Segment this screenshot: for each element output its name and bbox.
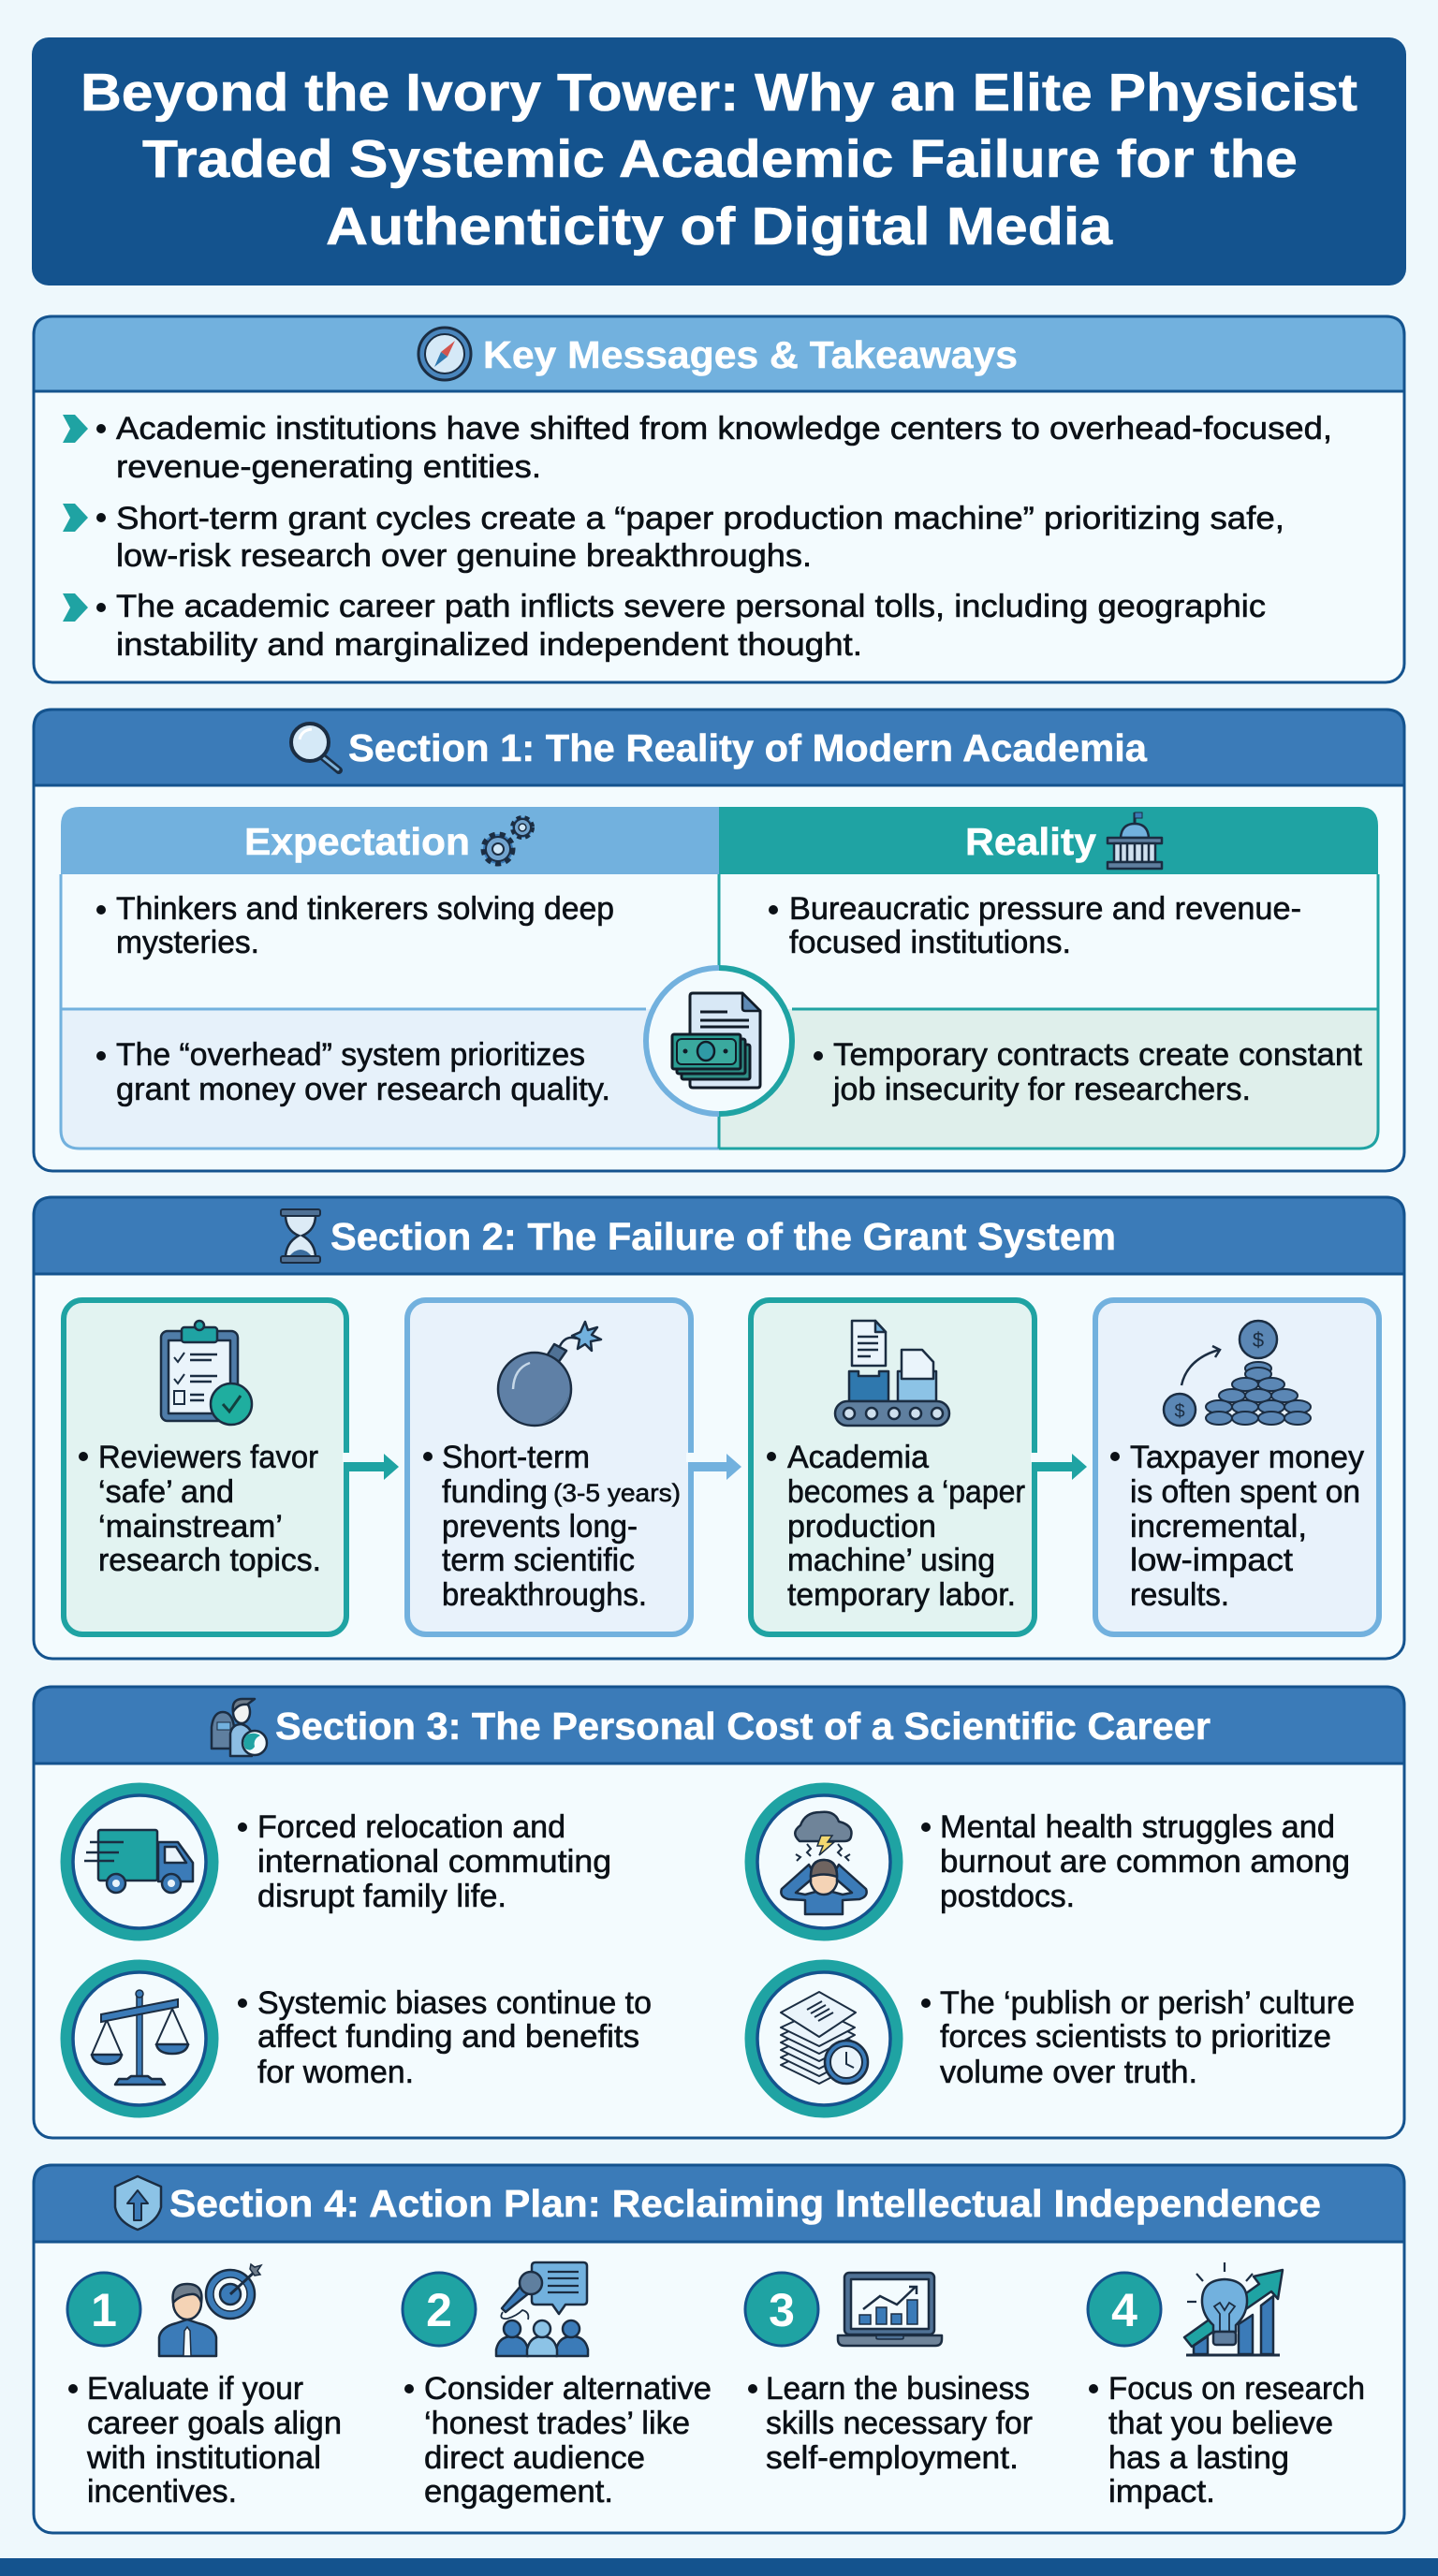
cell: expectation 1: Thinkers and tinkerers solving deep <box>116 891 614 927</box>
icon: paper conveyor <box>835 1321 949 1426</box>
panel: section 1 <box>34 710 1404 1171</box>
list: key messages: Academic institutions have shifted from knowledge centers to overhead-focused, <box>116 411 1332 446</box>
icon: coins <box>1164 1321 1311 1426</box>
list: key messages: Short-term grant cycles create a “paper production machine” prioritizing safe, <box>116 501 1284 536</box>
panel: section 2 <box>34 1197 1404 1659</box>
text: card 3: production <box>787 1509 936 1544</box>
text: relocation: Forced relocation and <box>257 1809 565 1845</box>
step 4 <box>1088 2262 1365 2510</box>
reality column header: Reality <box>965 820 1096 863</box>
icon: clipboard <box>161 1321 252 1425</box>
text: card 3: temporary labor. <box>787 1577 1016 1613</box>
arrow: card 1 to 2 <box>343 1453 399 1480</box>
card 3 <box>751 1300 1034 1634</box>
cell: expectation 2: grant money over research quality. <box>116 1072 610 1107</box>
cell: reality 1: Bureaucratic pressure and revenue- <box>789 891 1301 927</box>
cell: expectation 1 <box>96 891 614 960</box>
icon: microphone and audience <box>496 2262 588 2356</box>
text: mental health: burnout are common among <box>940 1844 1350 1880</box>
text: card 2 <box>423 1440 681 1613</box>
badge: 3 <box>745 2273 818 2346</box>
heading: section 1: Section 1: The Reality of Modern Academia <box>348 726 1148 769</box>
badge: 2: 2 <box>426 2284 452 2336</box>
cell: reality 2: Temporary contracts create constant <box>833 1037 1362 1073</box>
text: publish or perish: The ‘publish or perish’ culture <box>940 1985 1355 2021</box>
cell: reality 2: job insecurity for researchers. <box>832 1072 1251 1107</box>
text: bias <box>238 1985 652 2090</box>
card 2 <box>407 1300 691 1634</box>
icon: stressed person <box>751 1789 897 1935</box>
text: card 3 <box>767 1440 1025 1613</box>
item: bias <box>66 1966 652 2112</box>
cell: reality 1 <box>769 891 1301 960</box>
text: relocation <box>238 1809 611 1914</box>
item: relocation <box>66 1789 611 1935</box>
text: card 2: (3-5 years) <box>553 1479 681 1507</box>
heading: key messages: Key Messages & Takeaways <box>483 333 1018 376</box>
text: card 2: prevents long- <box>442 1509 638 1544</box>
text: step 4: that you believe <box>1108 2406 1333 2441</box>
text: card 3: becomes a ‘paper <box>787 1474 1025 1510</box>
title banner: Authenticity of Digital Media <box>326 197 1113 256</box>
heading: section 2: Section 2: The Failure of the Grant System <box>330 1215 1116 1258</box>
row 2 backgrounds <box>62 1009 1377 1148</box>
footer bar <box>0 2558 1438 2576</box>
icon: document and money <box>646 968 792 1114</box>
text: step 1: incentives. <box>87 2474 237 2510</box>
icon: laptop with chart <box>838 2273 942 2346</box>
cell: expectation 1: mysteries. <box>116 925 259 960</box>
list: key messages: The academic career path inflicts severe personal tolls, including geographic <box>116 589 1266 624</box>
arrow: card 2 to 3 <box>686 1453 741 1480</box>
card 1 <box>64 1300 346 1634</box>
badge: 1 <box>67 2273 140 2346</box>
icon: person and target <box>159 2264 261 2356</box>
icon: bomb <box>498 1322 601 1426</box>
text: step 2: ‘honest trades’ like <box>424 2406 690 2441</box>
list: key messages: instability and marginalized independent thought. <box>116 627 862 663</box>
badge: 2 <box>403 2273 476 2346</box>
expectation column header <box>61 807 719 874</box>
cell: reality 1: focused institutions. <box>789 925 1071 960</box>
badge: 4: 4 <box>1111 2284 1137 2336</box>
step 1 <box>67 2264 342 2510</box>
comparison table <box>61 807 1378 1149</box>
text: card 4: Taxpayer money <box>1130 1440 1365 1475</box>
text: card 4: is often spent on <box>1130 1474 1360 1510</box>
icon: institution building <box>1108 812 1162 869</box>
text: card 1: ‘safe’ and <box>98 1474 234 1510</box>
icon: shield <box>115 2176 161 2230</box>
text: card 2: Short-term <box>442 1440 590 1475</box>
text: step 3: skills necessary for <box>766 2406 1033 2441</box>
text: bias: affect funding and benefits <box>257 2019 639 2055</box>
text: mental health <box>921 1809 1350 1914</box>
badge: 4 <box>1088 2273 1161 2346</box>
text: step 4: has a lasting <box>1108 2440 1289 2476</box>
text: step 3: Learn the business <box>766 2371 1030 2407</box>
text: bias: Systemic biases continue to <box>257 1985 652 2021</box>
text: card 1: Reviewers favor <box>98 1440 318 1475</box>
arrow: card 3 to 4 <box>1031 1453 1087 1480</box>
text: card 4: low-impact <box>1130 1543 1293 1578</box>
icon: coins: $ <box>1174 1401 1185 1422</box>
icon: lightbulb and growth <box>1184 2262 1283 2355</box>
heading: section 3: Section 3: The Personal Cost of a Scientific Career <box>275 1705 1211 1748</box>
panel: section 4 <box>34 2165 1404 2533</box>
expectation column header: Expectation <box>244 820 470 863</box>
text: step 4: impact. <box>1108 2474 1215 2510</box>
icon: moving truck <box>66 1789 213 1935</box>
text: step 3 <box>748 2371 1033 2476</box>
text: card 4: results. <box>1130 1577 1229 1613</box>
text: relocation: disrupt family life. <box>257 1879 506 1914</box>
text: step 3: self-employment. <box>766 2440 1019 2476</box>
text: step 2: Consider alternative <box>424 2371 712 2407</box>
text: step 2 <box>404 2371 712 2510</box>
icon: coins: $ <box>1253 1328 1264 1352</box>
title banner: Traded Systemic Academic Failure for the <box>142 129 1298 189</box>
item: mental health <box>751 1789 1350 1935</box>
reality column header <box>719 807 1378 874</box>
badge: 3: 3 <box>769 2284 795 2336</box>
text: card 2: term scientific <box>442 1543 635 1578</box>
heading: section 4: Section 4: Action Plan: Reclaiming Intellectual Independence <box>169 2182 1321 2225</box>
badge: 1: 1 <box>91 2284 117 2336</box>
text: step 4 <box>1089 2371 1365 2510</box>
text: step 2: engagement. <box>424 2474 613 2510</box>
text: card 1 <box>79 1440 321 1578</box>
title banner: Beyond the Ivory Tower: Why an Elite Physicist <box>81 63 1357 123</box>
cell: expectation 2 <box>96 1037 610 1107</box>
text: card 2: breakthroughs. <box>442 1577 647 1613</box>
text: step 1: career goals align <box>87 2406 342 2441</box>
icon: compass <box>418 328 471 380</box>
title banner <box>32 37 1406 285</box>
icon: hourglass <box>281 1209 320 1263</box>
list: key messages <box>63 411 1332 663</box>
icon: scales <box>66 1966 213 2112</box>
step 3 <box>745 2273 1033 2476</box>
text: publish or perish: volume over truth. <box>940 2055 1197 2090</box>
text: card 4 <box>1110 1440 1365 1613</box>
cell: reality 2 <box>814 1037 1362 1107</box>
item: publish or perish <box>751 1966 1355 2112</box>
text: step 1 <box>68 2371 342 2510</box>
text: step 1: Evaluate if your <box>87 2371 303 2407</box>
text: relocation: international commuting <box>257 1844 611 1880</box>
text: publish or perish: forces scientists to prioritize <box>940 2019 1331 2055</box>
text: card 1: research topics. <box>98 1543 321 1578</box>
list: key messages: low-risk research over genuine breakthroughs. <box>116 538 812 574</box>
text: step 1: with institutional <box>86 2440 321 2476</box>
icon: magnifier <box>291 724 339 770</box>
text: card 3: Academia <box>787 1440 930 1475</box>
panel: key messages <box>34 316 1404 682</box>
panel: section 3 <box>34 1687 1404 2138</box>
text: publish or perish <box>921 1985 1355 2090</box>
icon: traveler <box>212 1699 267 1756</box>
text: mental health: Mental health struggles and <box>940 1809 1335 1845</box>
text: step 2: direct audience <box>424 2440 645 2476</box>
icon: paper stack and clock <box>751 1966 897 2112</box>
cell: expectation 2: The “overhead” system prioritizes <box>116 1037 585 1073</box>
list: key messages: revenue-generating entities. <box>116 449 541 485</box>
text: bias: for women. <box>257 2055 414 2090</box>
text: card 4: incremental, <box>1130 1509 1307 1544</box>
card 4 <box>1095 1300 1379 1634</box>
text: card 1: ‘mainstream’ <box>98 1509 283 1544</box>
icon: gears <box>483 817 533 864</box>
text: card 2: funding <box>442 1474 548 1510</box>
text: mental health: postdocs. <box>940 1879 1075 1914</box>
step 2 <box>403 2262 712 2510</box>
text: step 4: Focus on research <box>1108 2371 1365 2407</box>
text: card 3: machine’ using <box>787 1543 995 1578</box>
